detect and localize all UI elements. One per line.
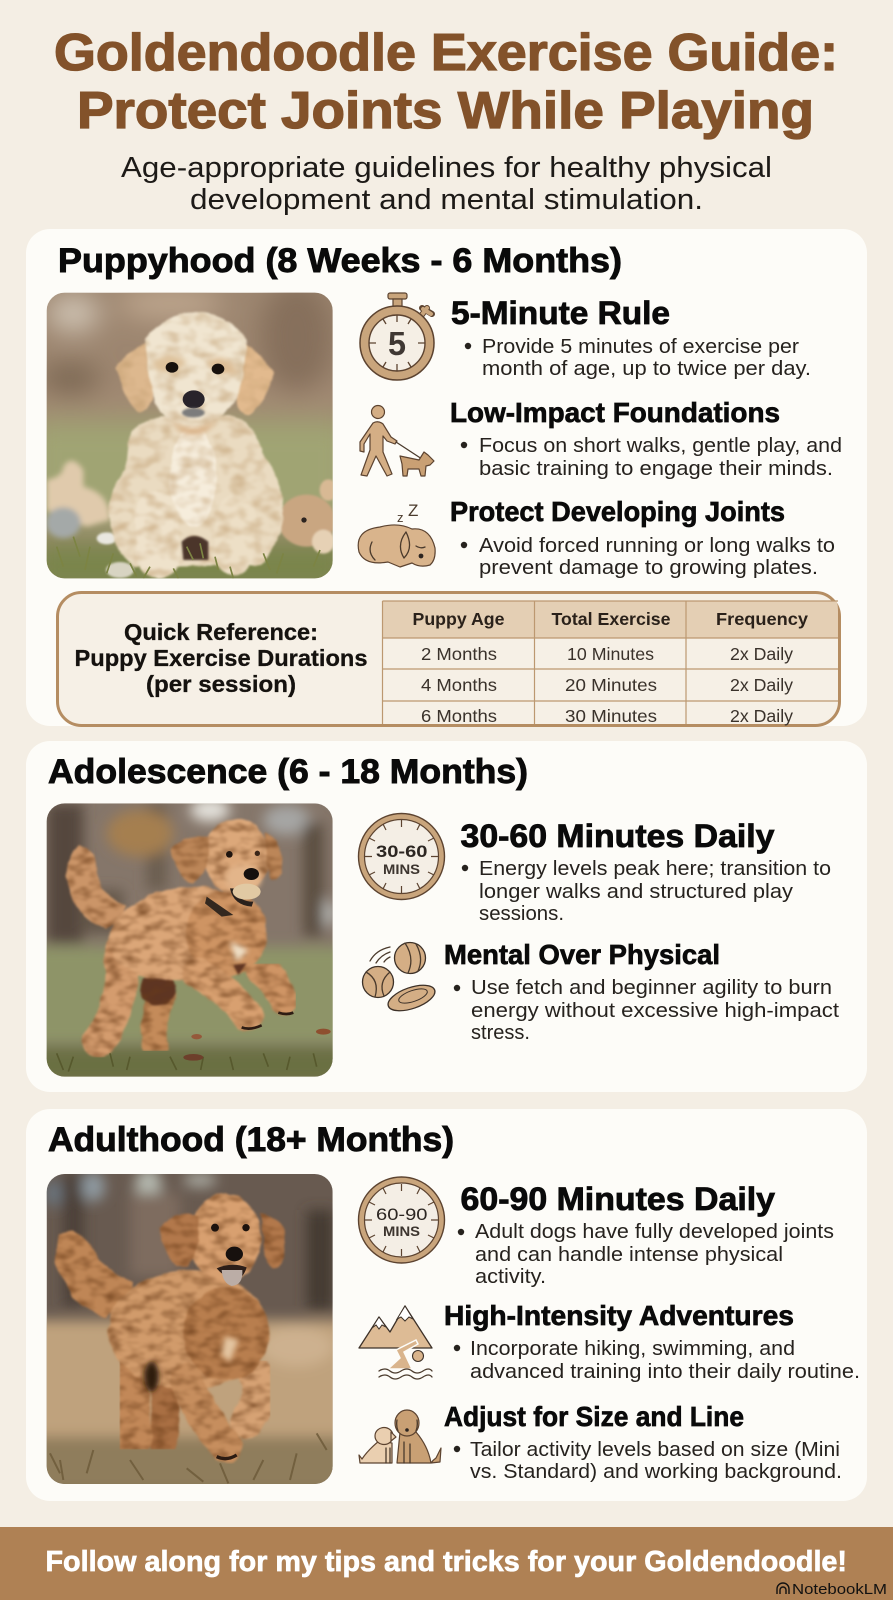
item: mental over physical <box>444 939 839 1044</box>
table rows: 6 Months <box>421 706 497 726</box>
table header labels: Total Exercise <box>552 609 671 629</box>
icon: stopwatch: 5 <box>388 325 406 362</box>
item: high-intensity adventures: advanced training into their daily routine. <box>470 1360 860 1383</box>
table rows: 4 Months <box>421 675 497 695</box>
table rows: 10 Minutes <box>567 644 654 664</box>
icon: small and large dogs <box>359 1410 441 1463</box>
quick reference label <box>74 619 367 697</box>
heading: puppyhood: Puppyhood (8 Weeks - 6 Months) <box>58 242 622 280</box>
dog tail and torso <box>55 1232 269 1447</box>
icon: balls and frisbee <box>362 942 438 1016</box>
dog head <box>160 1193 285 1283</box>
item: mental over physical: energy without excessive high-impact <box>471 999 839 1022</box>
item: adjust for size and line: Adjust for Size and Line <box>444 1401 744 1432</box>
icon: 30-60 clock: 30-60 <box>376 842 428 861</box>
item: mental over physical: Use fetch and beginner agility to burn <box>471 976 832 999</box>
item: low-impact foundations: Focus on short walks, gentle play, and <box>479 434 842 457</box>
item: mental over physical: stress. <box>471 1021 530 1044</box>
puppy head <box>145 312 247 427</box>
item: low-impact foundations <box>450 397 842 480</box>
title: Protect Joints While Playing <box>77 82 814 140</box>
table rows: 20 Minutes <box>565 675 657 695</box>
icon: 30-60 clock <box>358 814 444 900</box>
item: protect developing joints <box>450 496 835 579</box>
item: 60-90 minutes daily: Adult dogs have fully developed joints <box>475 1220 834 1243</box>
table rows: 2x Daily <box>730 644 793 664</box>
quick reference label: Quick Reference: <box>124 619 318 645</box>
panel: adolescence <box>26 741 867 1092</box>
item: protect developing joints: Protect Developing Joints <box>450 496 785 527</box>
item: 60-90 minutes daily: 60-90 Minutes Daily <box>460 1181 775 1217</box>
subtitle <box>121 152 772 216</box>
item: adjust for size and line <box>444 1401 842 1483</box>
table header labels: Puppy Age <box>412 609 505 629</box>
table rows: 2x Daily <box>730 706 793 726</box>
icon: sleeping puppy: z <box>397 510 404 525</box>
heading: adulthood: Adulthood (18+ Months) <box>48 1121 454 1159</box>
subtitle: Age-appropriate guidelines for healthy physical <box>121 152 772 184</box>
panel: quick reference table <box>58 592 840 726</box>
item: low-impact foundations: basic training to engage their minds. <box>479 457 833 480</box>
table header labels <box>412 609 808 629</box>
table rows <box>421 644 793 726</box>
item: 5-minute rule: Provide 5 minutes of exercise per <box>482 335 799 358</box>
table rows: 2 Months <box>421 644 497 664</box>
icon: sleeping puppy: Z <box>408 501 418 520</box>
quick reference label: (per session) <box>146 671 296 697</box>
icon: person walking dog <box>360 406 434 476</box>
item: adjust for size and line: Tailor activity levels based on size (Mini <box>470 1438 840 1461</box>
grass <box>57 537 320 578</box>
table header band <box>383 601 838 638</box>
panel: puppyhood <box>26 229 867 726</box>
puppy body <box>108 415 284 567</box>
heading: adolescence: Adolescence (6 - 18 Months) <box>48 753 528 791</box>
dog head <box>172 819 282 894</box>
item: adjust for size and line: vs. Standard) and working background. <box>470 1460 842 1483</box>
item: 30-60 minutes daily <box>460 818 831 925</box>
dog far legs <box>140 970 284 1045</box>
item: 30-60 minutes daily: longer walks and structured play <box>479 880 794 903</box>
icon: 60-90 clock: MINS <box>383 1223 420 1239</box>
photo: adult doodle running <box>46 1174 333 1484</box>
dog far legs <box>130 1367 260 1443</box>
title: Goldendoodle Exercise Guide: <box>54 24 838 82</box>
item: high-intensity adventures: Incorporate hiking, swimming, and <box>470 1337 795 1360</box>
item: 5-minute rule <box>451 295 811 380</box>
item: protect developing joints: Avoid forced running or long walks to <box>479 534 835 557</box>
item: 60-90 minutes daily: activity. <box>475 1265 546 1288</box>
item: 30-60 minutes daily: 30-60 Minutes Daily <box>460 818 775 854</box>
toys <box>46 461 110 538</box>
icon: 60-90 clock: 60-90 <box>376 1205 428 1224</box>
icon: sleeping puppy <box>358 501 435 567</box>
item: 5-minute rule: 5-Minute Rule <box>451 295 670 331</box>
item: protect developing joints: prevent damage to growing plates. <box>479 556 818 579</box>
item: 30-60 minutes daily: Energy levels peak here; transition to <box>479 857 831 880</box>
footer text: Follow along for my tips and tricks for your Goldendoodle! <box>46 1546 847 1578</box>
item: high-intensity adventures <box>444 1300 860 1383</box>
item: low-impact foundations: Low-Impact Foundations <box>450 397 780 428</box>
photo: running adolescent doodle <box>30 798 350 1083</box>
item: 60-90 minutes daily: and can handle intense physical <box>475 1243 783 1266</box>
quick reference label: Puppy Exercise Durations <box>74 645 367 671</box>
item: 60-90 minutes daily <box>458 1181 834 1288</box>
subtitle: development and mental stimulation. <box>190 184 703 216</box>
table grid <box>382 601 838 724</box>
icon: stopwatch <box>360 293 434 380</box>
notebooklm badge: NotebookLM <box>792 1581 887 1598</box>
icon: 30-60 clock: MINS <box>383 861 420 877</box>
dog tail and body <box>67 846 267 1042</box>
item: 30-60 minutes daily: sessions. <box>479 902 564 925</box>
item: 5-minute rule: month of age, up to twice per day. <box>482 357 811 380</box>
title <box>54 24 838 140</box>
table header labels: Frequency <box>716 609 808 629</box>
puppy ears behind head <box>116 342 274 416</box>
icon: mountains and swimmer <box>359 1306 432 1379</box>
table rows: 30 Minutes <box>565 706 657 726</box>
table rows: 2x Daily <box>730 675 793 695</box>
panel: adulthood <box>26 1109 867 1501</box>
item: mental over physical: Mental Over Physical <box>444 939 720 970</box>
footer banner <box>0 1527 893 1600</box>
item: high-intensity adventures: High-Intensity Adventures <box>444 1300 794 1331</box>
photo: cream puppy <box>46 292 333 578</box>
icon: 60-90 clock <box>358 1177 444 1263</box>
